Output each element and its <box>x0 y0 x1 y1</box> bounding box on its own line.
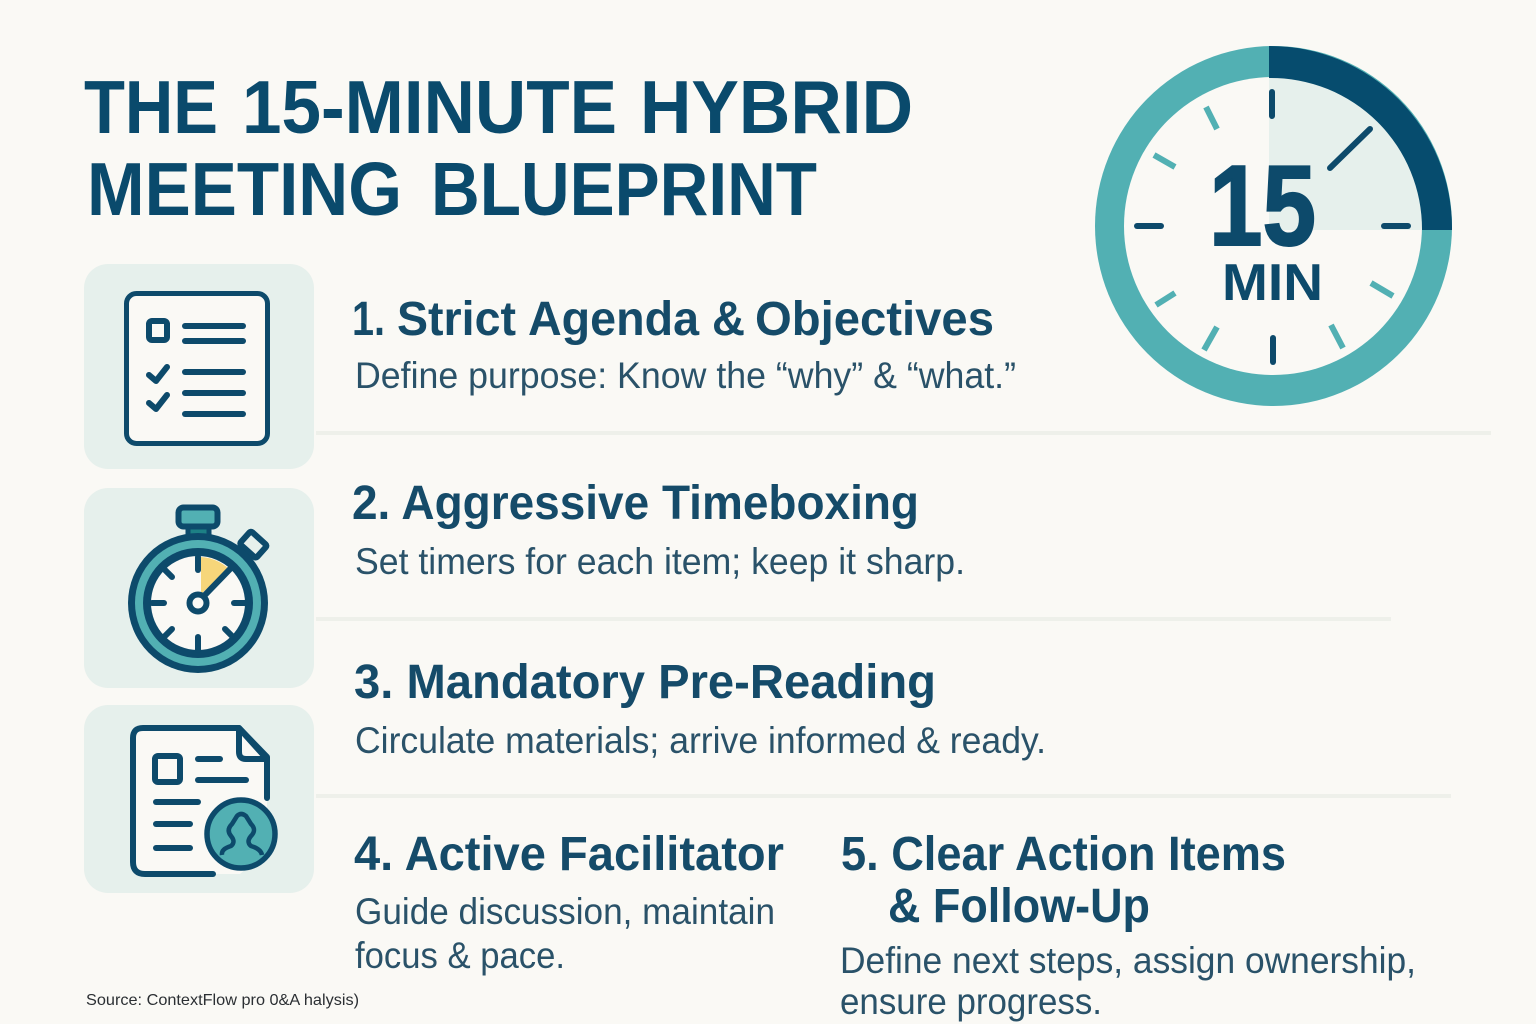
heading 1: Objectives <box>755 293 994 346</box>
heading 1 <box>352 293 994 346</box>
description 1: Define purpose: Know the “why” & “what.” <box>355 355 1016 396</box>
15 minute clock graphic: 15 <box>1209 143 1316 270</box>
description 2: Set timers for each item; keep it sharp. <box>355 541 965 582</box>
point 1: strict agenda <box>352 293 1016 396</box>
point 3: mandatory pre-reading <box>354 656 1046 761</box>
title: BLUEPRINT <box>431 147 817 231</box>
point 5: clear action items <box>840 828 1416 1022</box>
heading 1: 1. <box>352 293 385 346</box>
description 4: Guide discussion, maintain <box>355 891 775 932</box>
panel: pre-reading document icon <box>84 705 314 893</box>
heading 1: Agenda <box>528 293 699 346</box>
heading 4: 4. Active Facilitator <box>354 828 784 881</box>
description 4: focus & pace. <box>355 935 565 976</box>
heading 5 <box>841 828 1286 933</box>
title: THE <box>84 65 218 149</box>
title: MEETING <box>87 147 402 231</box>
15 minute clock graphic: MIN <box>1222 254 1323 312</box>
description 5: ensure progress. <box>840 981 1102 1022</box>
title <box>84 65 913 231</box>
heading 5: & Follow-Up <box>888 880 1150 933</box>
description 5: Define next steps, assign ownership, <box>840 940 1416 981</box>
heading 1: Strict <box>397 293 516 346</box>
description 5 <box>840 940 1416 1022</box>
description 4 <box>355 891 775 976</box>
description 3: Circulate materials; arrive informed & ready. <box>355 720 1046 761</box>
point 4: active facilitator <box>354 828 784 976</box>
heading 5: 5. Clear Action Items <box>841 828 1286 881</box>
heading 3: 3. Mandatory Pre-Reading <box>354 656 936 709</box>
15 minute clock graphic <box>1095 46 1452 406</box>
source note: Source: ContextFlow pro 0&A halysis) <box>86 992 359 1009</box>
panel: checklist icon <box>84 264 314 469</box>
heading 2: 2. Aggressive Timeboxing <box>352 477 919 530</box>
title: 15-MINUTE <box>242 65 617 149</box>
point 2: aggressive timeboxing <box>352 477 965 582</box>
title: HYBRID <box>640 65 913 149</box>
panel: stopwatch icon <box>84 488 314 688</box>
heading 1: & <box>712 293 745 346</box>
